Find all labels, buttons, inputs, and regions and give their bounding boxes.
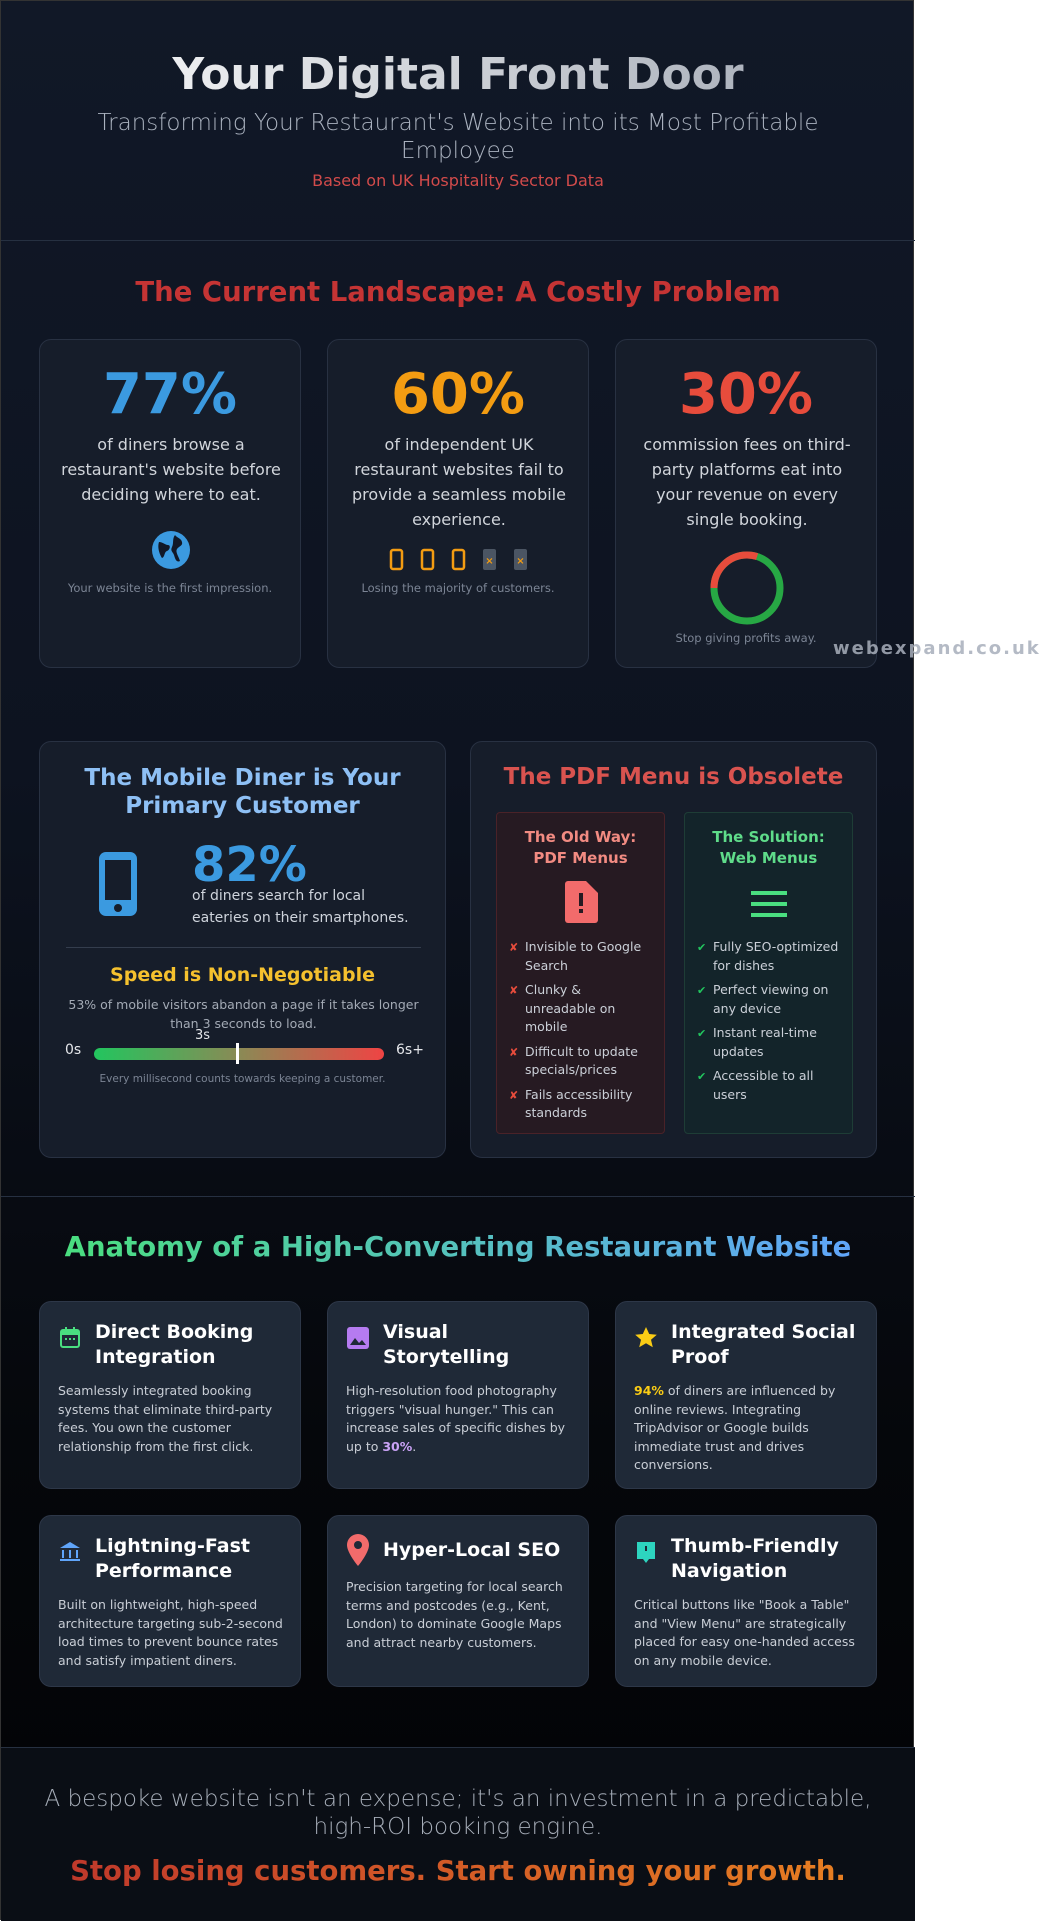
feature: visual storytelling [327,1301,589,1489]
feature: social proof: Proof [671,1346,729,1368]
feature: hyper-local seo: Hyper-Local SEO [383,1539,560,1561]
speed bar [65,1028,424,1064]
old way box: The Old Way: [525,828,636,846]
stat card 60%: Losing the majority of customers. [361,581,555,595]
old way box: PDF Menus [533,849,628,867]
solution box: Fully SEO-optimized for dishes [713,939,838,972]
stat card 77%: Your website is the first impression. [68,581,272,595]
panel: mobile diner: The Mobile Diner is Your [84,765,401,791]
stat card 60%: 60% [391,362,525,427]
feature: lightning fast: Performance [95,1560,232,1582]
feature: lightning fast: Built on lightweight, high-speed architecture targeting sub-2-second load times to prevent bounce rates and satisfy impatient diners. [58,1597,283,1668]
feature: thumb-friendly [615,1515,877,1687]
old way box [496,812,665,1134]
solution box: Perfect viewing on any device [713,982,828,1016]
solution box [684,812,853,1134]
stat card 77%: 77% [103,362,237,427]
feature: visual storytelling: Storytelling [383,1346,509,1368]
solution box: ✔ [697,941,706,954]
feature: social proof [615,1301,877,1489]
stat card 77%: of diners browse a restaurant's website before deciding where to eat. [61,435,281,504]
icon: globe [152,531,190,569]
footer [1,1747,915,1921]
feature: thumb-friendly: Critical buttons like "Book a Table" and "View Menu" are strategically placed for easy one-handed access on any mobile device. [634,1597,855,1668]
icon: pdf [565,881,598,923]
feature: thumb-friendly: Thumb-Friendly [671,1535,839,1557]
panel: mobile diner: of diners search for local [192,888,365,904]
old way box: Fails accessibility standards [525,1086,632,1120]
panel: mobile diner [39,741,446,1158]
panel: mobile diner: Primary Customer [125,793,360,819]
feature: social proof: Integrated Social [671,1321,855,1343]
icon: menu lines [751,891,787,917]
feature: visual storytelling: High-resolution food photography triggers "visual hunger." This can increase sales of specific dishes by up to 30%. [346,1383,565,1454]
feature: lightning fast [39,1515,301,1687]
feature: lightning fast: Lightning-Fast [95,1535,250,1557]
header [1,1,915,241]
stat card 30%: commission fees on third-party platforms eat into your revenue on every single booking. [643,435,851,529]
stat card 30% [615,339,877,668]
watermark: webexpand.co.uk [833,638,1041,659]
feature: direct booking: Direct Booking [95,1321,253,1343]
stat card 60%: of independent UK restaurant websites fail to provide a seamless mobile experience. [352,435,566,529]
solution box: Instant real-time updates [713,1025,817,1058]
donut chart [710,552,784,624]
feature: direct booking: Integration [95,1346,216,1368]
section heading: landscape: The Current Landscape: A Costly Problem [135,276,781,308]
icon: phones: × [516,556,525,567]
title [1,47,915,103]
old way box: ✘ [509,1088,518,1102]
panel: mobile diner: 53% of mobile visitors abandon a page if it takes longer than 3 seconds to load. [68,997,419,1031]
title: Your Digital Front Door [172,49,744,100]
section heading: anatomy: Anatomy of a High-Converting Restaurant Website [65,1231,851,1263]
call to action: Stop losing customers. Start owning your growth. [70,1855,846,1887]
old way box: Invisible to Google Search [525,939,641,972]
panel: PDF menu [470,741,877,1158]
subtitle: Transforming Your Restaurant's Website into its Most Profitable Employee [98,110,818,164]
solution box: Web Menus [720,849,817,867]
footer: A bespoke website isn't an expense; it's an investment in a predictable, high-ROI booking engine. [44,1786,872,1840]
speed bar: 0s [65,1042,81,1058]
solution box: ✔ [697,984,706,997]
panel: mobile diner: 82% [192,837,307,893]
solution box: The Solution: [712,828,825,846]
panel: PDF menu: The PDF Menu is Obsolete [504,764,843,790]
icon: phone [99,852,137,916]
icon: phones [390,548,527,570]
solution box: ✔ [697,1027,706,1040]
stat card 60% [327,339,589,668]
feature: hyper-local seo [327,1515,589,1687]
speed bar: 3s [195,1028,210,1043]
stat card 77% [39,339,301,668]
feature: hyper-local seo: Precision targeting for local search terms and postcodes (e.g., Kent, London) to dominate Google Maps and attract nearby customers. [346,1579,563,1650]
feature: social proof: 94% of diners are influenced by online reviews. Integrating TripAdvisor or Google builds immediate trust and drives conversions. [634,1383,835,1472]
stat card 30%: Stop giving profits away. [675,631,817,645]
old way box: unreadable on mobile [525,1000,615,1034]
old way box: ✘ [509,984,518,997]
old way box: Clunky & [525,982,581,997]
panel: mobile diner: eateries on their smartphones. [192,910,409,926]
source note: Based on UK Hospitality Sector Data [312,171,604,190]
old way box: ✘ [509,941,518,954]
feature: direct booking [39,1301,301,1489]
speed heading: Speed is Non-Negotiable [110,964,375,986]
solution box: Accessible to all users [713,1068,813,1102]
stat card 30%: 30% [679,362,813,427]
icon: phones: × [485,556,494,567]
old way box: Difficult to update specials/prices [525,1044,638,1077]
panel: mobile diner: Every millisecond counts towards keeping a customer. [100,1073,385,1085]
feature: visual storytelling: Visual [383,1321,448,1343]
solution box: ✔ [697,1070,706,1083]
feature: direct booking: Seamlessly integrated booking systems that eliminate third-party fees. You own the customer relationship from the first click. [58,1383,272,1454]
feature: thumb-friendly: Navigation [671,1560,787,1582]
old way box: ✘ [509,1046,518,1058]
speed bar: 6s+ [396,1042,424,1058]
